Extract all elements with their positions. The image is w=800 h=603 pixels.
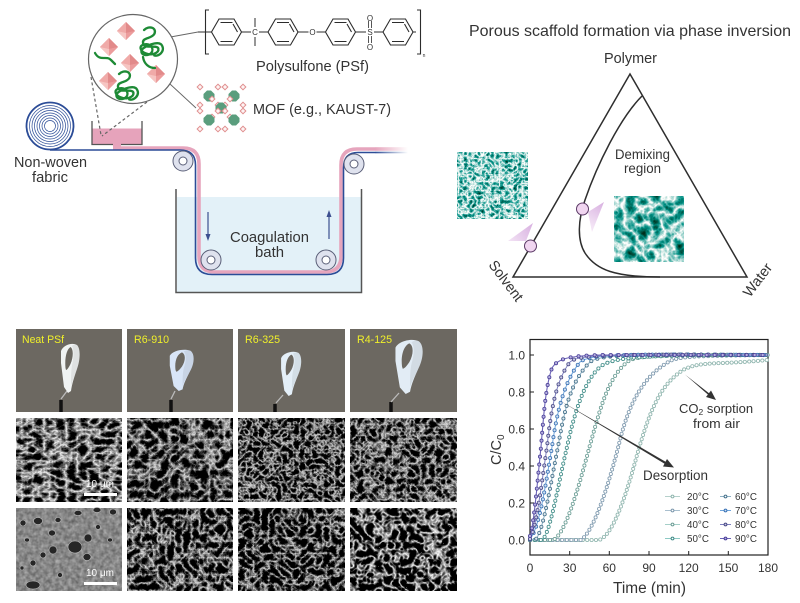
large pore texture [614,196,684,262]
curve: 30°C [530,355,768,540]
SEM: R6-910 cross-section [127,508,233,591]
y tick labels: 0.4 [508,460,525,474]
legend: 80°C: 80°C [735,520,757,531]
panel: photographs and SEM images [16,329,457,591]
icon: MOF lattice [197,84,246,132]
photo: R6-910: R6-910 [134,334,169,346]
panel: ternary phase diagram [457,51,776,305]
label: CO2 sorption from air: CO [679,401,698,416]
photo: R6-910 [127,329,233,412]
rollers [173,151,364,270]
SEM: R4-125 cross-section [350,508,457,591]
arrow: desorption [558,400,674,468]
SEM: R6-325 cross-section [238,508,345,591]
arrow: up [326,210,332,239]
curve: 20°C [530,360,768,540]
photo: R6-325: R6-325 [245,334,280,346]
x tick labels: 0 [527,561,534,575]
x tick labels: 30 [563,561,577,575]
label: CO2 sorption from air: sorption [703,401,753,416]
plot frame [530,340,768,555]
panel: breakthrough chart [489,340,778,597]
y axis title: 0 [496,434,507,440]
x tick labels: 60 [603,561,616,575]
label: desorption: Desorption [643,468,708,483]
curve: 80°C [530,355,768,539]
curve: 90°C [530,355,768,536]
legend: 20°C: 20°C [687,492,709,503]
atoms: O [367,43,373,52]
photo: R4-125: R4-125 [357,334,392,346]
title: phase inversion: Porous scaffold formation via phase inversion [469,23,791,40]
x tick labels [527,561,778,575]
SEM: Neat PSf cross-section [16,508,122,591]
dashed zoom lines [91,77,147,136]
dense pore texture [457,152,528,219]
wedge left [508,223,533,241]
SEM: Neat PSf cross-section: 10 μm [86,567,114,579]
photo: Neat PSf: Neat PSf [22,334,65,346]
label: polysulfone: Polysulfone (PSf) [256,58,369,75]
curve: 60°C [530,355,768,540]
label: CO2 sorption from air: 2 [698,407,704,417]
point on curve [576,203,588,215]
curve: 70°C [530,355,768,539]
chemical structure: polysulfone [198,10,426,59]
photo: R6-325 [238,329,345,412]
y tick labels: 0.0 [508,534,525,548]
legend [665,492,757,545]
y tick labels [508,348,525,548]
brackets [206,10,420,54]
label: coagulation bath: bath [255,244,284,261]
legend: 30°C: 30°C [687,506,709,517]
SEM: R6-910 surface [127,418,233,502]
fabric roll [26,102,74,150]
atoms: C [252,28,258,37]
leader lines [165,32,198,108]
photo: Neat PSf [16,329,122,412]
curve: 40°C [530,355,768,540]
panel: membrane casting process [14,14,408,292]
SEM: Neat PSf surface: 10 μm [86,478,114,490]
legend: 90°C: 90°C [735,534,757,545]
point on left edge [524,240,536,252]
legend: 40°C: 40°C [687,520,709,531]
arrow: down [206,212,210,241]
x axis title: Time (min) [613,580,686,597]
legend: 70°C: 70°C [735,506,757,517]
x tick labels: 180 [758,561,778,575]
curve: 50°C [530,355,768,540]
y tick labels: 1.0 [508,348,525,362]
pink polymer coating band [113,148,375,272]
label: demixing region: region [624,161,661,176]
casting dish [92,121,142,149]
arrow: CO2 sorption [685,374,716,400]
y tick labels: 0.8 [508,386,525,400]
label: coagulation bath: Coagulation [230,229,309,246]
x tick labels: 150 [718,561,739,575]
axis ticks [530,355,728,555]
label: CO2 sorption from air: from air [693,416,741,431]
polymer chains [95,27,163,100]
atoms: S [367,28,373,37]
legend: 60°C: 60°C [735,492,757,503]
y tick labels: 0.2 [508,496,525,510]
y axis title: C/C [489,440,505,465]
label: water: Water [740,260,776,300]
SEM: Neat PSf surface [16,418,122,502]
magnified circle [88,14,178,104]
fading band ends [375,147,408,153]
MOF crystals [99,22,165,90]
photo: R4-125 [350,329,457,412]
atoms [251,14,426,59]
label: demixing region: Demixing [615,147,670,162]
label: polymer: Polymer [604,51,657,67]
wedge right [588,202,604,232]
label: MOF: MOF (e.g., KAUST-7) [253,101,391,118]
label: solvent: Solvent [485,258,526,305]
legend: 50°C: 50°C [687,534,709,545]
label: demixing region [615,147,670,176]
atoms: O [309,28,316,37]
x tick labels: 120 [679,561,699,575]
label: coagulation bath [230,229,309,261]
y tick labels: 0.6 [508,422,525,436]
ternary triangle [513,74,747,277]
SEM: R4-125 surface [350,418,457,502]
coagulation bath container [176,189,362,292]
label: non-woven fabric: Non-woven [14,154,87,171]
x tick labels: 90 [642,561,656,575]
label: CO2 sorption from air [679,401,753,431]
rings [212,19,413,45]
binodal curve [579,96,660,277]
blue fabric band [50,150,375,274]
coagulation bath water [177,197,361,292]
label: non-woven fabric: fabric [32,169,68,186]
label: non-woven fabric [14,154,87,186]
SEM: R6-325 surface [238,418,345,502]
atoms: O [367,14,373,23]
atoms: n [423,53,426,59]
